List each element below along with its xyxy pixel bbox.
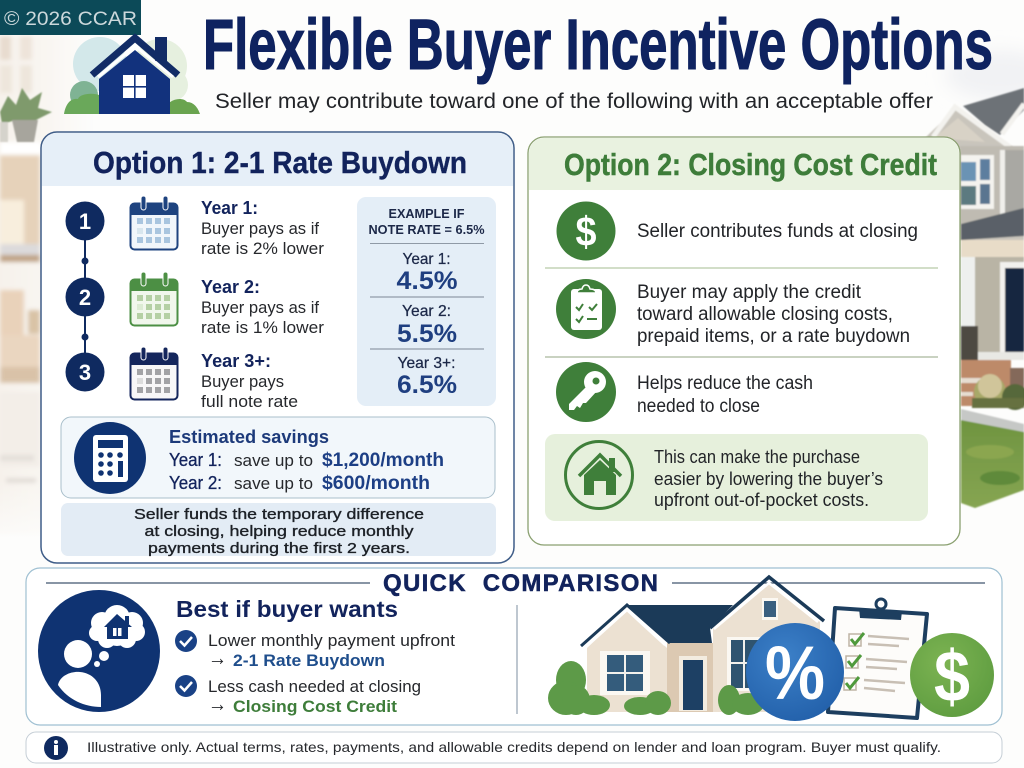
callout: easier purchase: This can make the purchase	[654, 447, 860, 467]
icon: house logo	[64, 37, 200, 114]
icon: percent badge: %	[765, 631, 825, 716]
icon: home	[566, 442, 632, 508]
icon: calendar year 1	[130, 196, 178, 250]
panel: quick comparison	[26, 568, 1002, 725]
panel: example rates: Year 1:	[402, 251, 450, 268]
item: buyer may apply	[556, 279, 910, 347]
text: year 2: rate is 1% lower	[201, 318, 324, 337]
heading: option 2: Option 2: Closing Cost Credit	[564, 147, 937, 182]
illustration: house	[548, 577, 824, 715]
text: year 1	[201, 198, 324, 258]
panel: estimated savings: $600/month	[322, 473, 430, 494]
heading: option 1: Option 1: 2-1 Rate Buydown	[93, 145, 467, 180]
badge: copyright: © 2026 CCAR	[4, 9, 137, 30]
item: less cash needed: Closing Cost Credit	[233, 697, 397, 716]
item: buyer may apply: prepaid items, or a rate buydown	[637, 326, 910, 347]
panel: estimated savings	[61, 417, 495, 498]
panel: example rates: Year 2:	[402, 303, 451, 320]
callout: easier purchase: easier by lowering the buyer’s	[654, 469, 883, 489]
text: year 1: rate is 2% lower	[201, 239, 324, 258]
item: seller contributes: Seller contributes funds at closing	[637, 221, 918, 242]
note: seller funds	[61, 503, 496, 557]
illustration: clipboard	[828, 599, 927, 718]
icon: clipboard	[556, 279, 616, 339]
panel header: option 2	[529, 138, 959, 190]
item: lower monthly payment: 2-1 Rate Buydown	[233, 651, 385, 670]
icon: buyer thinking	[38, 590, 160, 712]
note: seller funds: Seller funds the temporary difference	[134, 506, 424, 523]
item: lower monthly payment: →	[208, 645, 227, 670]
text: year 3	[201, 351, 298, 411]
text: year 3: Buyer pays	[201, 372, 284, 391]
panel: estimated savings: Estimated savings	[169, 427, 329, 447]
item: reduce cash: needed to close	[637, 396, 760, 417]
icon: dollar badge: $	[934, 637, 970, 717]
text: year 2: Year 2:	[201, 277, 260, 297]
item: buyer may apply: toward allowable closing costs,	[637, 304, 893, 325]
item: reduce cash	[556, 362, 813, 422]
background: sky	[945, 50, 1024, 100]
disclaimer bar: Illustrative only. Actual terms, rates, payments, and allowable credits depend on lender and loan program. Buyer must qualify.	[87, 739, 941, 755]
background: blurred interior	[0, 35, 94, 535]
disclaimer bar	[26, 732, 1002, 763]
background: interior fade	[0, 480, 100, 550]
text: year 2: Buyer pays as if	[201, 298, 319, 317]
icon: dollar	[556, 202, 616, 260]
panel: option 1	[41, 132, 514, 563]
icon: percent badge	[746, 623, 844, 721]
item: lower monthly payment	[175, 630, 455, 670]
callout: easier purchase: upfront out-of-pocket costs.	[654, 490, 869, 510]
item: seller contributes	[556, 202, 918, 260]
item: lower monthly payment: Lower monthly payment upfront	[208, 631, 455, 650]
subtitle: Seller may contribute toward one of the following with an acceptable offer	[215, 89, 933, 113]
text: year 1: Buyer pays as if	[201, 219, 319, 238]
panel: estimated savings: save up to	[234, 451, 313, 470]
icon: info	[44, 736, 68, 760]
icon: calculator	[74, 422, 146, 494]
icon: background plant	[0, 88, 52, 142]
timeline: 2	[79, 285, 91, 310]
callout: easier purchase	[545, 434, 928, 521]
timeline: 1	[79, 209, 91, 234]
icon: key	[556, 362, 616, 422]
text: year 2	[201, 277, 324, 337]
heading: best if buyer wants: Best if buyer wants	[176, 596, 398, 622]
panel: estimated savings: $1,200/month	[322, 450, 444, 471]
text: year 1: Year 1:	[201, 198, 258, 218]
icon: calendar year 3	[130, 347, 178, 400]
panel: example rates	[357, 197, 496, 406]
item: less cash needed: Less cash needed at closing	[208, 677, 421, 696]
item: reduce cash: Helps reduce the cash	[637, 373, 813, 394]
icon: dollar: $	[576, 208, 596, 255]
heading: quick comparison: QUICK COMPARISON	[383, 570, 658, 597]
panel: example rates: 6.5%	[397, 371, 457, 399]
panel: estimated savings: Year 2:	[169, 473, 222, 493]
note: seller funds: at closing, helping reduce monthly	[144, 523, 414, 540]
panel: example rates: NOTE RATE = 6.5%	[368, 222, 485, 237]
text: year 3: full note rate	[201, 392, 298, 411]
note: seller funds: payments during the first 2 years.	[148, 540, 410, 557]
panel: example rates: EXAMPLE IF	[388, 206, 465, 221]
item: buyer may apply: Buyer may apply the credit	[637, 282, 862, 303]
background: house exterior	[925, 88, 1024, 508]
panel header: option 1	[42, 133, 513, 186]
text: year 3: Year 3+:	[201, 351, 271, 371]
panel: estimated savings: Year 1:	[169, 450, 222, 470]
panel: estimated savings: save up to	[234, 474, 313, 493]
icon: dollar badge	[910, 633, 994, 717]
timeline: 3	[79, 360, 91, 385]
timeline	[66, 202, 104, 392]
item: less cash needed	[175, 675, 421, 716]
badge: copyright	[0, 0, 141, 35]
panel: option 2	[528, 137, 960, 545]
panel: example rates: Year 3+:	[398, 355, 456, 372]
panel: example rates: 4.5%	[396, 267, 458, 295]
icon: calendar year 2	[130, 272, 178, 326]
panel: example rates: 5.5%	[397, 320, 457, 348]
item: less cash needed: →	[208, 691, 227, 716]
